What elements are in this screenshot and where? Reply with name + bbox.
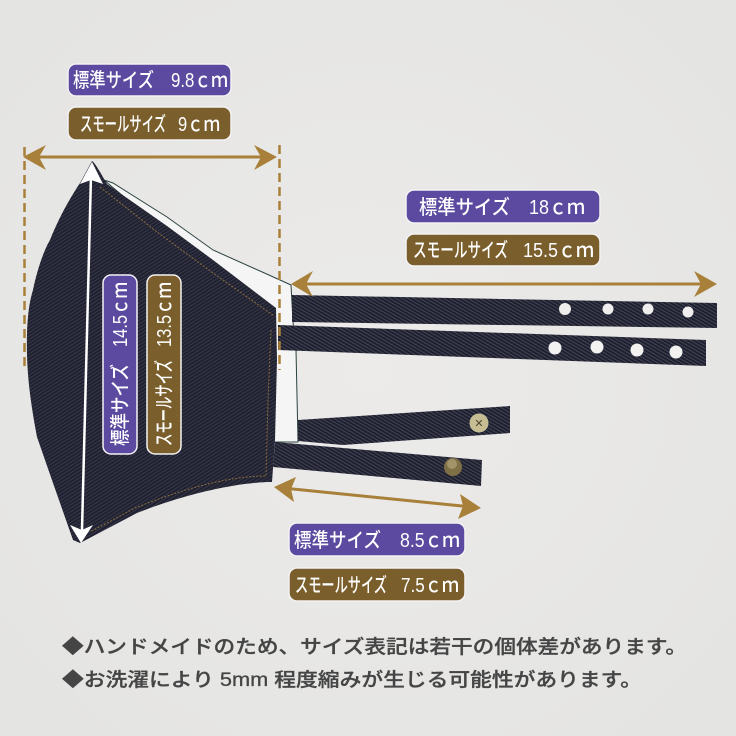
label: upper strap standard: 標準サイズ [419, 196, 510, 219]
label: lower strap small: スモールサイズ [295, 574, 387, 597]
mask body [27, 161, 277, 543]
label: lower strap standard [289, 523, 465, 556]
label: height standard: 標準サイズ [109, 364, 132, 446]
lower strap: snap stud [273, 442, 482, 486]
dimension: upper strap arrow [291, 271, 717, 297]
label: width small: 9ｃｍ [178, 114, 220, 136]
label: upper strap standard [406, 190, 600, 223]
label: width standard: 9.8ｃｍ [171, 70, 228, 92]
label: width small: スモールサイズ [80, 113, 166, 136]
label: lower strap small: 7.5ｃｍ [401, 575, 459, 597]
dimension: mask height arrow [70, 162, 103, 543]
upper strap 2 [278, 325, 706, 366]
label: upper strap small: スモールサイズ [413, 239, 508, 262]
upper strap 1 [292, 295, 717, 328]
label: height standard: 14.5ｃｍ [110, 282, 132, 347]
white lining [104, 180, 298, 442]
label: upper strap standard: 18ｃｍ [529, 197, 585, 219]
label: width standard [68, 64, 231, 96]
dimension: lower strap arrow [274, 477, 481, 519]
label: lower strap small [289, 568, 465, 601]
label: width small [68, 107, 231, 140]
dimension: mask width arrow [23, 145, 280, 370]
mask photo [27, 161, 717, 543]
stitching [90, 187, 274, 532]
label: lower strap standard: 標準サイズ [294, 529, 381, 552]
note: handmade: ◆ハンドメイドのため、サイズ表記は若干の個体差があります。 [62, 635, 687, 658]
label: height small: スモールサイズ [153, 360, 176, 446]
label: height small [147, 275, 181, 454]
label: lower strap standard: 8.5ｃｍ [400, 530, 460, 552]
label: height small: 13.5ｃｍ [154, 282, 176, 347]
lower strap: button: ✕ [474, 418, 484, 430]
label: upper strap small [406, 234, 600, 266]
label: width standard: 標準サイズ [73, 69, 154, 92]
lower strap: button [298, 406, 510, 445]
note: washing: ◆お洗濯により 5mm 程度縮みが生じる可能性があります。 [62, 669, 642, 691]
label: upper strap small: 15.5ｃｍ [523, 240, 594, 262]
label: height standard [103, 275, 137, 454]
